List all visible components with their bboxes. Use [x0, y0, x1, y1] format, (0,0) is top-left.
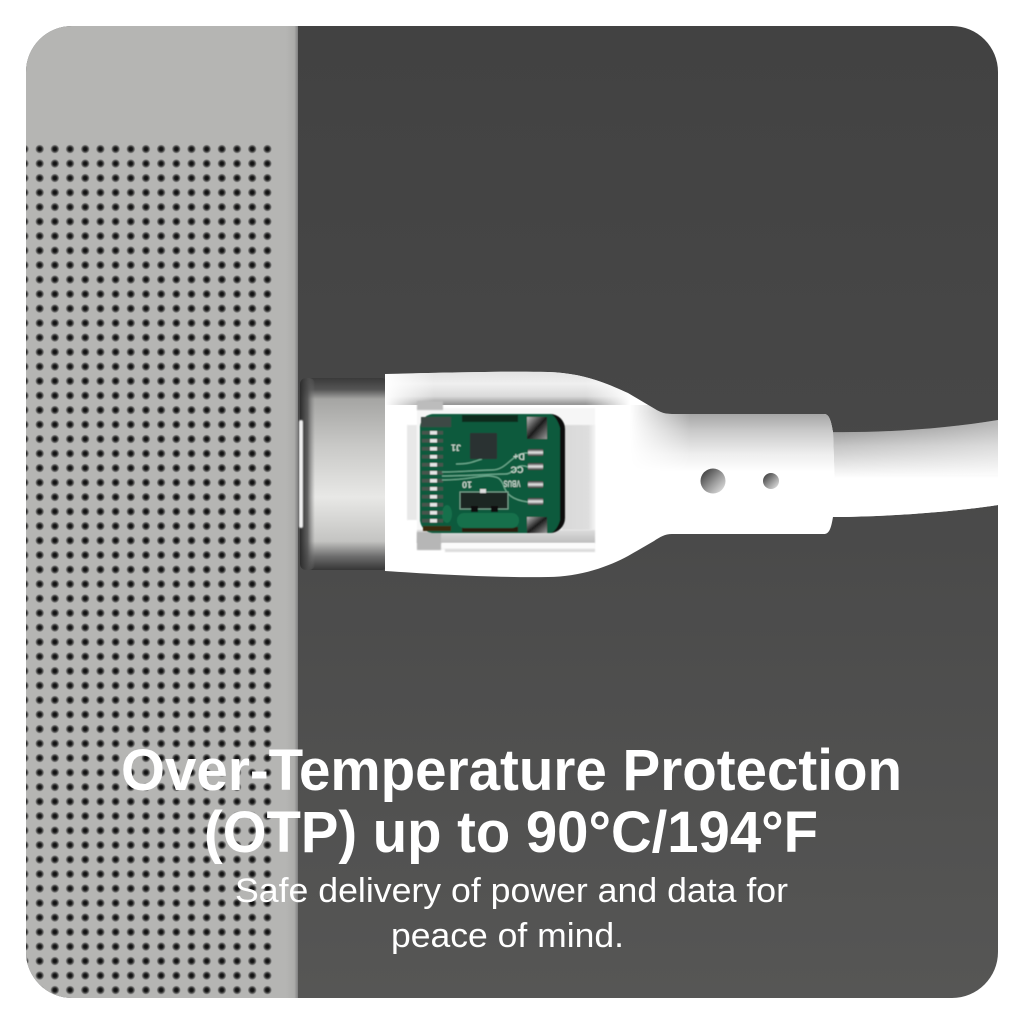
silkscreen labels: J1	[451, 442, 461, 452]
left contact pins	[422, 431, 443, 522]
silkscreen labels: D+	[513, 452, 525, 462]
title	[121, 738, 902, 865]
title: (OTP) up to 90°C/194°F	[204, 800, 818, 865]
illustration: USB-C cable connector	[299, 370, 998, 577]
subtitle: Safe delivery of power and data for	[235, 872, 788, 910]
metal connector shell	[299, 378, 390, 570]
contact pads	[527, 417, 547, 533]
solder points	[471, 506, 478, 512]
silkscreen labels	[451, 442, 525, 490]
icon: larger vent hole	[700, 468, 726, 494]
panel: perforated light grey speaker grille	[26, 26, 298, 998]
icon: smaller vent hole	[763, 473, 779, 489]
chip	[470, 433, 497, 459]
housing shading	[389, 372, 834, 464]
white housing	[385, 372, 835, 577]
transparent window frame	[407, 401, 595, 552]
silkscreen labels: 10	[462, 480, 472, 490]
silkscreen labels: VBUS	[504, 478, 520, 488]
title: Over-Temperature Protection	[121, 738, 902, 803]
subtitle: peace of mind.	[391, 917, 624, 955]
circuit board	[420, 414, 565, 533]
subtitle	[235, 872, 788, 955]
silkscreen labels: CC	[510, 464, 524, 474]
cable cord	[833, 420, 998, 517]
lower component	[460, 492, 508, 509]
traces	[442, 453, 528, 502]
